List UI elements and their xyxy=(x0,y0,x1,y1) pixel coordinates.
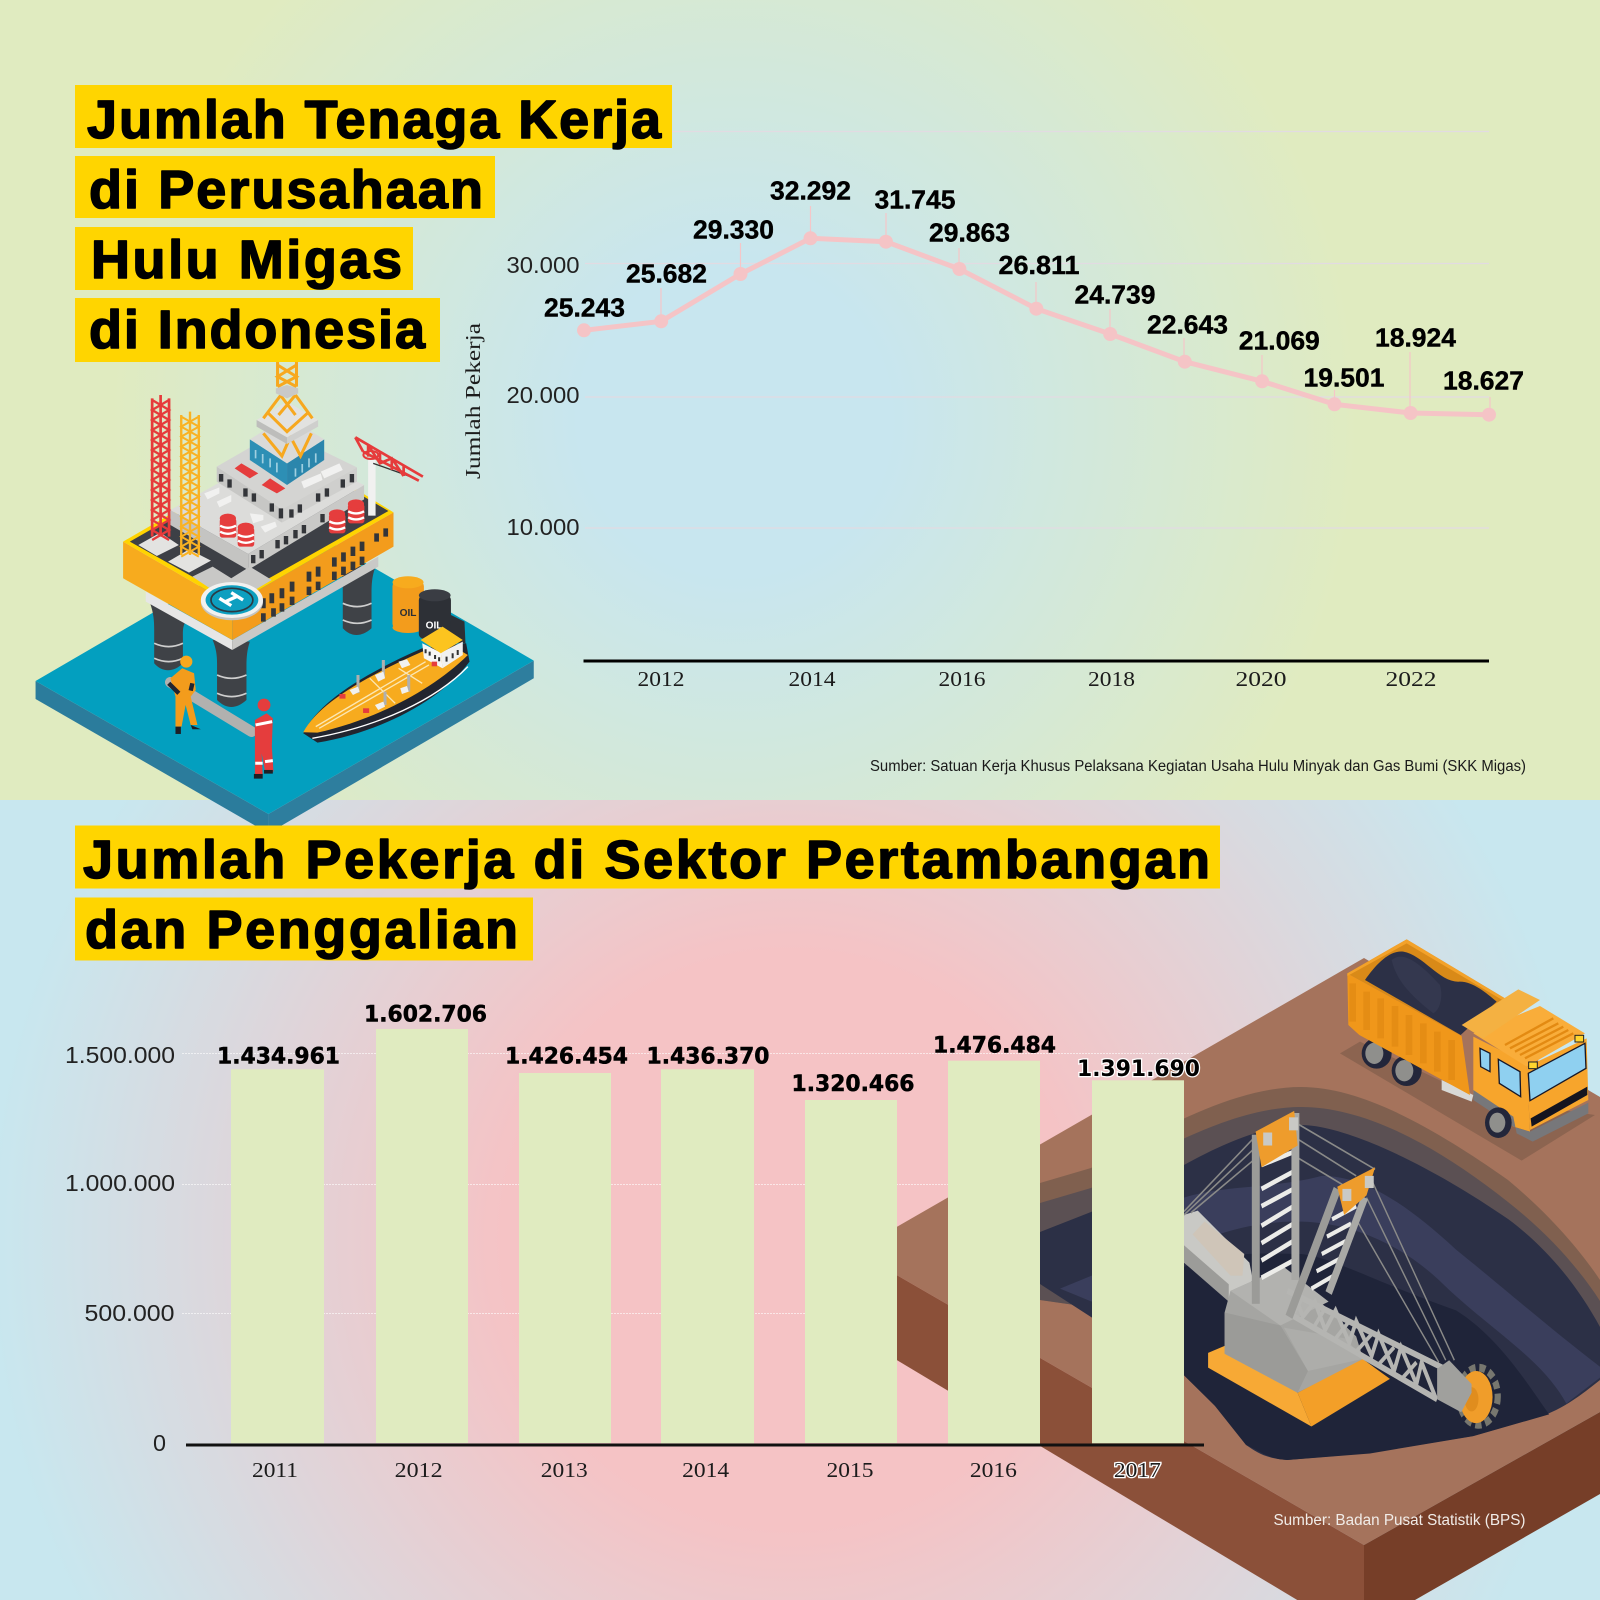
accommodation decks xyxy=(170,430,364,570)
y axis labels: 30.000 xyxy=(506,252,580,278)
dump truck xyxy=(1340,939,1595,1161)
conveyor arm xyxy=(1184,1211,1253,1302)
data labels: 29.330 xyxy=(693,215,774,245)
platform legs xyxy=(150,563,375,707)
title: bottom heading xyxy=(75,826,1220,960)
source: BPS: Sumber: Badan Pusat Statistik (BPS) xyxy=(1274,1512,1526,1529)
y axis labels: 1.500.000 xyxy=(65,1042,175,1068)
bar value labels: 1.436.370 xyxy=(646,1044,770,1069)
platform hull xyxy=(123,447,393,650)
mine ground block xyxy=(855,958,1600,1600)
y axis labels: 500.000 xyxy=(84,1300,174,1326)
oil drums xyxy=(392,576,465,643)
y axis title: Jumlah Pekerja xyxy=(461,322,485,479)
illustration: open-pit coal mine xyxy=(855,939,1600,1600)
x axis years: 2018 xyxy=(1088,667,1135,691)
data line xyxy=(584,238,1489,415)
title: bottom heading: dan Penggalian xyxy=(85,900,518,960)
data labels: 24.739 xyxy=(1074,280,1156,310)
data labels: 21.069 xyxy=(1239,325,1320,355)
data labels: 19.501 xyxy=(1304,363,1384,393)
data labels: 22.643 xyxy=(1147,309,1228,339)
panel: bottom background xyxy=(0,800,1600,1600)
data labels: 18.924 xyxy=(1375,323,1457,353)
x axis years: 2013 xyxy=(541,1458,588,1482)
red worker xyxy=(254,699,274,779)
x axis years xyxy=(252,1458,1161,1482)
data labels: 25.682 xyxy=(626,259,707,289)
bucket wheel xyxy=(1437,1360,1498,1425)
helipad xyxy=(201,582,263,620)
bar value labels: 1.426.454 xyxy=(505,1044,628,1069)
data labels: 18.627 xyxy=(1443,365,1524,395)
bar value labels: 1.391.690 xyxy=(1077,1057,1200,1082)
orange worker xyxy=(169,656,201,734)
bar value labels: 1.602.706 xyxy=(364,1003,487,1028)
title: top heading: di Perusahaan xyxy=(89,160,483,220)
x axis years: 2012 xyxy=(395,1458,443,1482)
source: SKK Migas: Sumber: Satuan Kerja Khusus Pelaksana Kegiatan Usaha Hulu Minyak dan Gas Bumi (SKK Migas) xyxy=(870,758,1526,775)
oil drums: OIL xyxy=(426,621,442,632)
sea base xyxy=(36,526,534,833)
tanker ship xyxy=(303,627,470,743)
x axis years xyxy=(638,667,1436,691)
data labels: 31.745 xyxy=(874,184,956,214)
bar value labels: 1.320.466 xyxy=(792,1072,914,1097)
y axis labels: 0 xyxy=(153,1430,166,1456)
oil drums: OIL xyxy=(400,608,416,619)
y axis labels: 20.000 xyxy=(506,382,580,408)
illustration: offshore oil platform xyxy=(36,362,534,833)
x axis years: 2022 xyxy=(1386,667,1436,691)
bucket-wheel excavator xyxy=(1184,1111,1498,1427)
x axis years: 2015 xyxy=(826,1458,874,1482)
x axis years: 2014 xyxy=(682,1458,730,1482)
line chart: oil and gas workers xyxy=(461,132,1524,691)
bar chart: mining workers xyxy=(65,1003,1204,1482)
yellow drilling tower xyxy=(168,412,211,573)
pit layers xyxy=(1060,1176,1600,1460)
y axis labels xyxy=(65,1042,175,1456)
machine body xyxy=(1225,1267,1363,1393)
x axis years: 2012 xyxy=(638,667,684,691)
pipe carried by workers xyxy=(170,682,252,732)
truck cab xyxy=(1462,989,1588,1142)
truck wheels xyxy=(1362,1038,1473,1102)
title: top heading: di Indonesia xyxy=(89,300,426,360)
truck shadow xyxy=(1340,1042,1595,1161)
dump bed xyxy=(1347,939,1505,1095)
x axis years: 2016 xyxy=(938,667,986,691)
x axis xyxy=(584,660,1489,662)
leader lines xyxy=(661,206,1490,414)
bars xyxy=(231,1029,1184,1444)
control tower block xyxy=(250,402,324,485)
panel: top background xyxy=(0,0,1600,800)
x axis years: 2011 xyxy=(252,1458,298,1482)
data labels: 29.863 xyxy=(929,217,1010,247)
x axis years: 2014 xyxy=(788,667,836,691)
x axis xyxy=(186,1444,1204,1446)
slanted tower xyxy=(1289,1167,1375,1317)
mine pit xyxy=(1000,1087,1600,1460)
derrick xyxy=(263,362,312,432)
data points xyxy=(577,231,1496,422)
y axis labels: 1.000.000 xyxy=(65,1170,175,1196)
title: top heading: Hulu Migas xyxy=(91,230,402,290)
y axis labels: 10.000 xyxy=(506,514,580,540)
y axis labels xyxy=(506,252,580,540)
boom lattice xyxy=(1287,1291,1449,1399)
x axis years: 2017 xyxy=(1114,1458,1161,1482)
x axis years: 2020 xyxy=(1236,667,1286,691)
bar value labels: 1.434.961 xyxy=(217,1044,340,1069)
data labels: 25.243 xyxy=(544,293,625,323)
data labels xyxy=(544,175,1524,395)
red drilling tower xyxy=(138,395,179,556)
bar value labels: 1.476.484 xyxy=(933,1034,1056,1059)
title: top heading xyxy=(75,85,672,362)
left tower xyxy=(1252,1111,1299,1304)
data labels: 32.292 xyxy=(770,175,851,205)
crane xyxy=(355,437,423,516)
orange crawler base xyxy=(1208,1344,1390,1427)
title: bottom heading: Jumlah Pekerja di Sektor Pertambangan xyxy=(83,830,1210,890)
x axis years: 2016 xyxy=(970,1458,1017,1482)
data labels: 26.811 xyxy=(998,250,1080,280)
red and white storage tanks xyxy=(220,499,364,547)
bar value labels xyxy=(217,1003,1200,1097)
cables xyxy=(1184,1124,1454,1362)
title: top heading: Jumlah Tenaga Kerja xyxy=(87,90,662,150)
